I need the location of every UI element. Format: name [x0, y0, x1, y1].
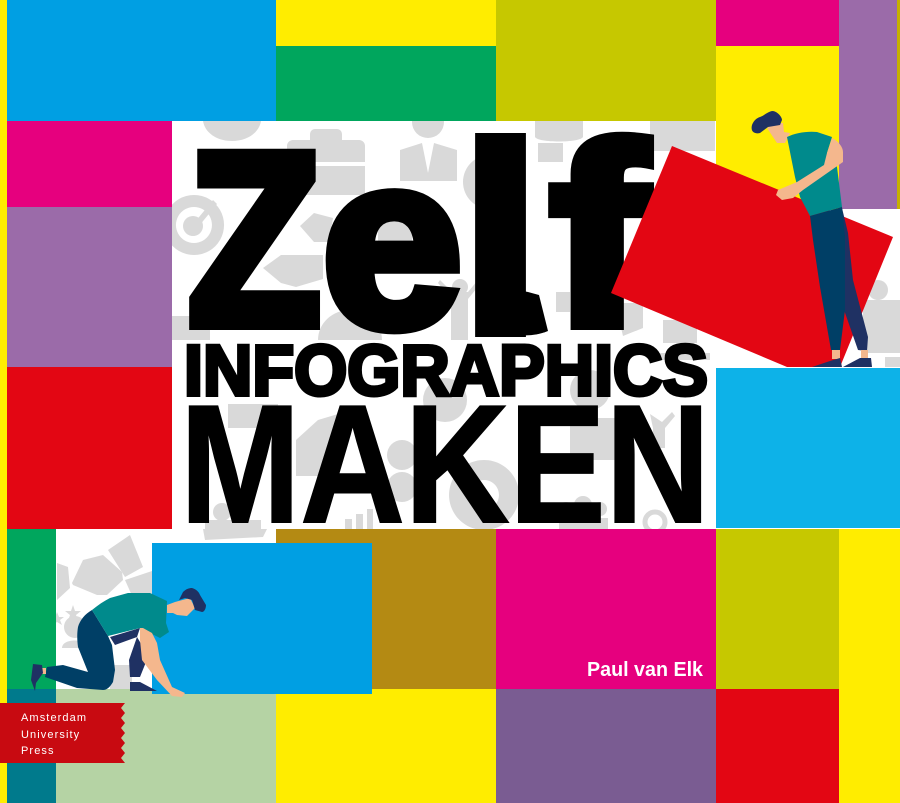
publisher logo [0, 703, 125, 763]
title: Zelf: f [550, 93, 650, 379]
title: MAKEN: MAKEN [180, 370, 710, 558]
title: Zelf: Z [188, 103, 321, 377]
title: Zelf [188, 91, 650, 388]
title: Zelf: l [462, 91, 539, 388]
figure: crouching man [31, 588, 206, 697]
publisher logo: Press [21, 745, 55, 757]
grey icon pattern [52, 106, 900, 690]
title: Zelf: e [322, 104, 462, 378]
publisher logo: Amsterdam [21, 712, 87, 724]
blue panel [152, 543, 372, 694]
figure: standing man holding red panel [752, 111, 872, 367]
author name: Paul van Elk [587, 659, 704, 681]
red tilted panel [611, 146, 893, 367]
publisher logo: University [21, 729, 80, 741]
title: INFOGRAPHICS: INFOGRAPHICS [184, 332, 708, 411]
